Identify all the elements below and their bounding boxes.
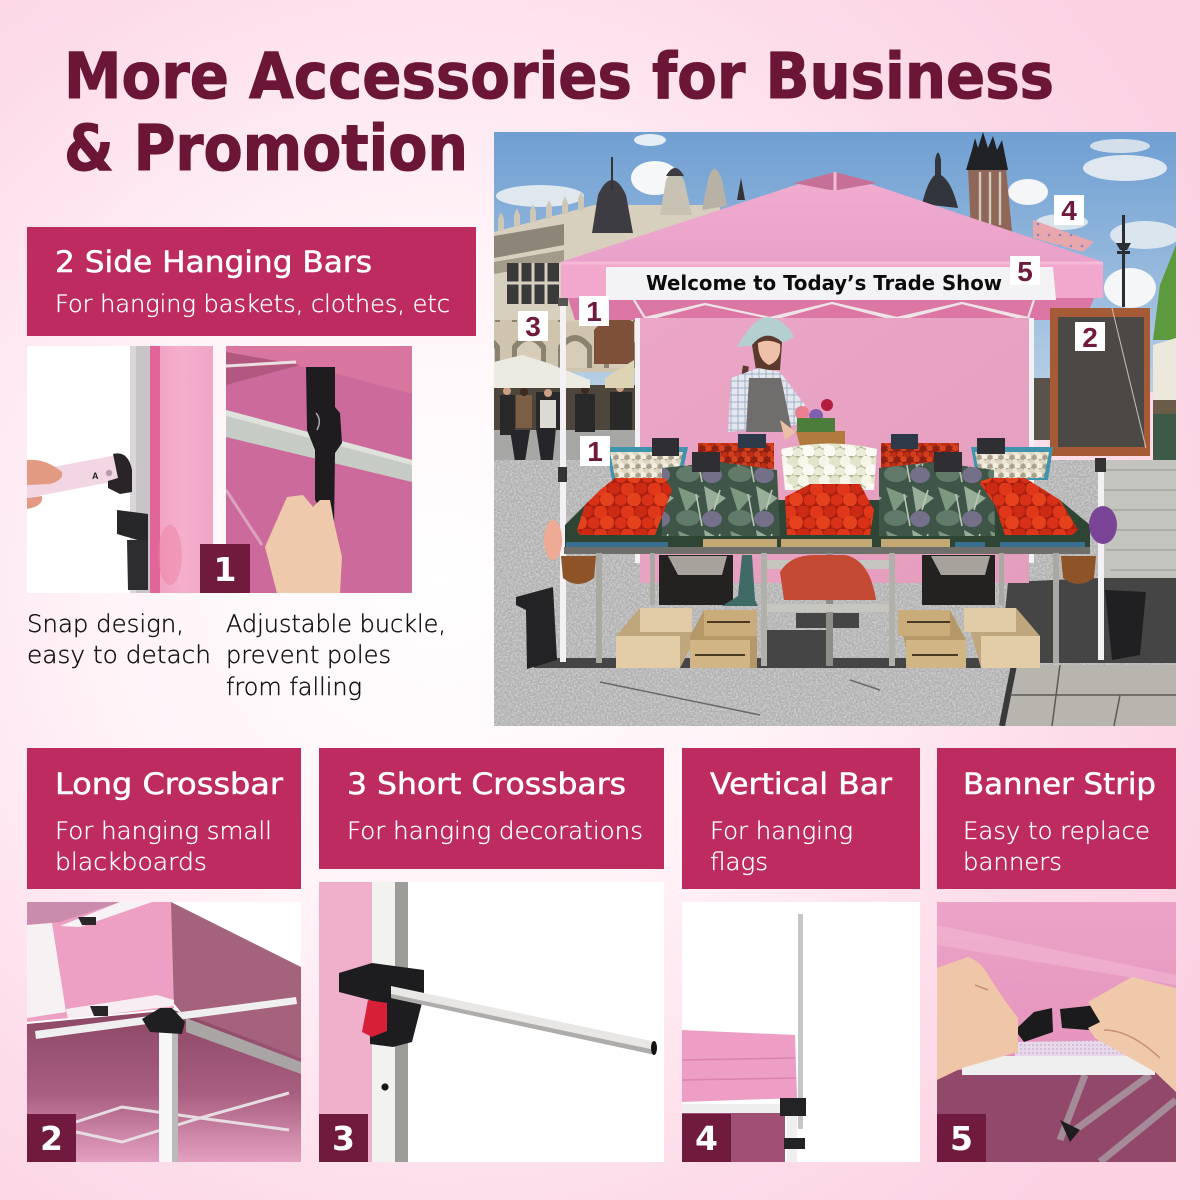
- panel: 2 side hanging bars header: For hanging baskets, clothes, etc: [55, 290, 450, 318]
- panel: 2 side hanging bars header: 2 Side Hanging Bars: [55, 245, 372, 279]
- panel: vertical bar header: flags: [710, 848, 768, 876]
- church towers: [922, 132, 1012, 232]
- panel: long crossbar header: For hanging small: [55, 817, 272, 845]
- sandbags: [516, 587, 1146, 669]
- badge: 3: [319, 1114, 368, 1162]
- marker 2: 2: [1082, 322, 1098, 353]
- photo: snap design detail: A: [92, 471, 99, 481]
- panel: long crossbar header: blackboards: [55, 848, 207, 876]
- badge: 2: [27, 1114, 76, 1162]
- badge: 4: 4: [695, 1119, 718, 1158]
- marker 5: 5: [1017, 256, 1033, 287]
- banner strip: [606, 267, 1056, 300]
- street lamp: [1116, 215, 1131, 307]
- back wall: [640, 318, 1029, 583]
- marker 1 lower: [580, 436, 610, 467]
- woman vendor: [728, 317, 805, 440]
- title: [64, 41, 1054, 186]
- panel: vertical bar header: Vertical Bar: [710, 767, 892, 801]
- sky: [494, 132, 1180, 392]
- caption: snap design: easy to detach: [27, 641, 211, 669]
- caption: snap design: Snap design,: [27, 610, 184, 638]
- panel: short crossbars header: [319, 748, 664, 869]
- caption: adjustable buckle: Adjustable buckle,: [226, 610, 446, 638]
- marker 4: [1054, 195, 1084, 226]
- badge: 5: 5: [950, 1119, 973, 1158]
- badge: 5: [937, 1114, 986, 1162]
- wooden crates: [616, 608, 1040, 668]
- panel: short crossbars header: 3 Short Crossbars: [347, 767, 626, 801]
- marker 1 upper: [579, 296, 609, 327]
- panel: banner strip header: [937, 748, 1176, 889]
- badge: 1: [200, 544, 250, 593]
- goods under the table: [659, 555, 995, 606]
- banner strip: Welcome to Today’s Trade Show: [646, 271, 1002, 295]
- marker 5: [1010, 256, 1040, 287]
- panel: banner strip header: Easy to replace: [963, 817, 1150, 845]
- marker 4: 4: [1061, 195, 1077, 226]
- title: More Accessories for Business: [64, 41, 1054, 114]
- tent posts: [558, 298, 1106, 662]
- panel: short crossbars header: For hanging decorations: [347, 817, 643, 845]
- caption: snap design: [27, 610, 211, 669]
- hanging baskets and flowers: [544, 506, 1117, 584]
- marker 3: 3: [525, 311, 541, 342]
- blackboard: [1050, 308, 1150, 456]
- badge: 1: 1: [214, 550, 236, 589]
- marker 1 upper: 1: [586, 296, 602, 327]
- photo: snap design detail: [27, 346, 213, 593]
- badge: 4: [682, 1114, 731, 1162]
- caption: adjustable buckle: from falling: [226, 673, 362, 701]
- panel: vertical bar header: [682, 748, 920, 889]
- old town hall building: [494, 157, 745, 372]
- panel: long crossbar header: Long Crossbar: [55, 767, 283, 801]
- panel: banner strip header: banners: [963, 848, 1062, 876]
- marker 1 lower: 1: [587, 436, 603, 467]
- tent flag: [1033, 220, 1094, 252]
- marker 2: [1075, 322, 1105, 353]
- title: & Promotion: [64, 113, 468, 186]
- photo: banner strip: [937, 902, 1176, 1162]
- caption: adjustable buckle: prevent poles: [226, 641, 391, 669]
- table: [564, 547, 1090, 666]
- tent roof: [561, 172, 1103, 268]
- ground shadows: [534, 578, 1176, 668]
- marker 3: [518, 311, 548, 342]
- panel: vertical bar header: For hanging: [710, 817, 853, 845]
- caption: adjustable buckle: [226, 610, 446, 701]
- panel: long crossbar header: [27, 748, 301, 889]
- pavement: [494, 460, 1176, 726]
- main photo: trade show canopy: [494, 132, 1180, 726]
- produce display: [565, 434, 1090, 547]
- flower basket: [795, 399, 845, 446]
- photo: short crossbar: [319, 882, 664, 1162]
- photo: long crossbar: [27, 902, 301, 1162]
- photo: vertical bar: [682, 902, 920, 1162]
- tree: [1153, 245, 1176, 340]
- photo: adjustable buckle detail: [226, 346, 412, 593]
- badge: 3: 3: [332, 1119, 355, 1158]
- badge: 2: 2: [40, 1119, 63, 1158]
- market stalls and crowd: [494, 338, 1176, 468]
- panel: banner strip header: Banner Strip: [963, 767, 1156, 801]
- valance and truss: [561, 262, 1103, 320]
- panel: 2 side hanging bars header: [27, 227, 476, 336]
